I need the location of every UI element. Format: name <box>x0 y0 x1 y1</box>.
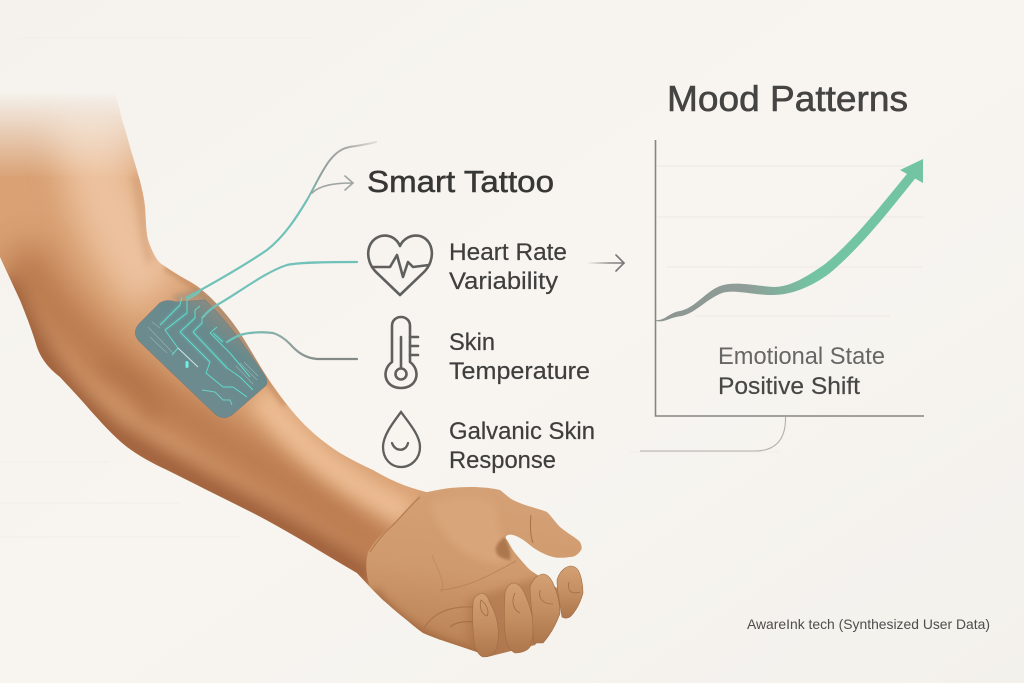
title: mood patterns: Mood Patterns <box>667 78 908 119</box>
finger: middle <box>530 574 560 643</box>
arrow to chart <box>588 255 624 271</box>
patch glow on skin <box>172 288 268 382</box>
finger: ring <box>504 583 533 653</box>
sensor node <box>186 361 188 368</box>
wire to skin temperature <box>227 332 357 359</box>
axes <box>656 140 924 416</box>
chart label line 2: Positive Shift <box>718 373 860 400</box>
circuit traces <box>148 292 258 405</box>
sensor: heart rate variability <box>368 236 567 295</box>
palm and thumb <box>366 487 582 657</box>
label: Galvanic Skin <box>449 418 595 445</box>
source credit: AwareInk tech (Synthesized User Data) <box>747 616 990 632</box>
patch body <box>135 300 267 418</box>
sensor: skin temperature <box>386 317 590 388</box>
hand <box>366 487 583 660</box>
wire to heart rate <box>203 262 357 317</box>
sensor: galvanic skin response <box>383 412 595 474</box>
chart label: Emotional State <box>718 343 885 370</box>
label line 2: Variability <box>449 268 558 295</box>
gridlines <box>657 166 924 316</box>
illustration: arm and hand <box>0 60 583 660</box>
bracket line <box>640 417 786 451</box>
title: smart tattoo: Smart Tattoo <box>367 164 554 199</box>
arrow head <box>900 159 923 183</box>
palm shading <box>372 498 560 660</box>
arrow to smart tattoo label <box>312 176 353 193</box>
wire to top <box>186 200 307 298</box>
connector lines <box>186 142 376 359</box>
finger: index <box>557 566 583 618</box>
faint background lines <box>0 38 780 537</box>
icon: heart with pulse <box>368 236 432 295</box>
smart tattoo patch <box>135 288 268 418</box>
label: Skin <box>449 329 495 356</box>
finger: pinky <box>473 593 498 657</box>
label line 2: Temperature <box>449 358 590 385</box>
trace glow <box>160 305 227 368</box>
label: Heart Rate <box>449 239 567 266</box>
label line 2: Response <box>449 447 556 474</box>
icon: water drop <box>383 412 420 467</box>
chart: mood over time <box>640 140 924 451</box>
fading tail of top wire <box>307 142 376 200</box>
icon: thermometer <box>386 317 418 388</box>
forearm and upper arm <box>0 98 440 640</box>
mood curve <box>656 168 918 321</box>
